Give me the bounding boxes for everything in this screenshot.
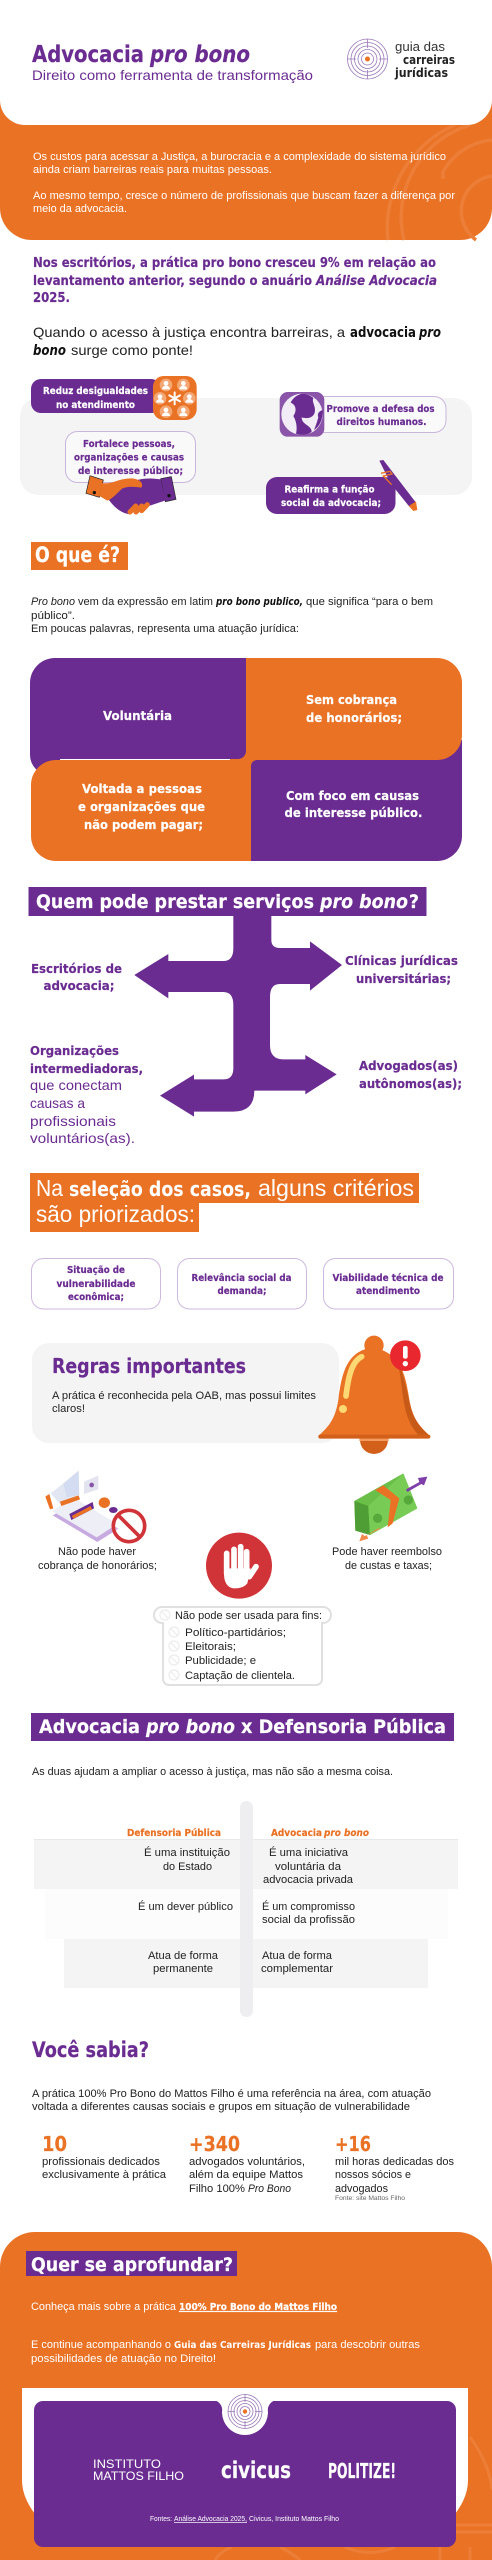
text: não pode haver cobrança: Não pode haver [58,1546,136,1558]
text: call to action: Guia das Carreiras Jurídicas [174,2339,311,2351]
row 1 [144,1846,354,1886]
icon: handshake [86,476,176,514]
logo: maze [228,2394,262,2428]
cell: voltada a pessoas: não podem pagar; [84,817,203,832]
highlight: pro bono growth: levantamento anterior, segundo o anuário [33,273,312,289]
stat: 10: 10 [42,2132,67,2156]
bridge statement: bono [33,343,66,359]
bridge statement: pro [418,325,441,341]
text: call to action: para descobrir outras [315,2339,420,2351]
stat: +16: nossos sócios e [335,2169,411,2181]
label: organizações: Organizações [30,1043,119,1058]
card: função social [266,477,396,514]
text: definition: público”. [31,610,75,622]
cell: com foco: Com foco em causas [286,788,419,803]
card: viabilidade: Viabilidade técnica de [332,1273,444,1284]
card: relevância [178,1258,306,1309]
text: sources: Fontes: [150,2516,172,2523]
cell: sem cobrança: Sem cobrança [306,692,397,707]
label: advogados: Advogados(as) [359,1058,458,1073]
stat: +340: além da equipe Mattos [189,2169,304,2181]
text: reembolso: de custas e taxas; [345,1560,432,1572]
card: vulnerabilidade: Situação de [67,1265,125,1276]
label: organizações: que conectam [30,1077,122,1093]
heading: você sabia: Você sabia? [32,2038,149,2062]
highlight: pro bono growth: 2025. [33,290,70,306]
text: reembolso [332,1546,442,1572]
row 3: permanente [153,1963,213,1975]
panel: quer se aprofundar [0,2232,492,2560]
row 3: Atua de forma [148,1950,219,1962]
title [32,42,313,83]
stat: 10: profissionais dedicados [42,2156,161,2168]
row 2: É um dever público [138,1900,233,1913]
card: direitos humanos: direitos humanos. [336,417,426,428]
label: organizações: voluntários(as). [30,1130,135,1146]
logo: guia das carreiras jurídicas: jurídicas [394,66,448,80]
stat: 10: exclusivamente à prática [42,2169,167,2181]
card: função social: social da advocacia; [281,498,381,509]
panel: regras importantes [32,1343,339,1443]
logo: guia das carreiras jurídicas [348,39,455,80]
card: vulnerabilidade: vulnerabilidade [56,1279,136,1290]
cell: com foco: de interesse público. [284,805,422,820]
heading: advocacia x defensoria [31,1713,454,1741]
cell: com foco [284,788,422,820]
bridge statement: advocacia [350,325,416,341]
column headers: Defensoria Pública [127,1827,221,1839]
stat: +16: +16 [335,2132,371,2156]
card: relevância: demanda; [218,1286,266,1297]
logo: civicus: civicus [221,2458,291,2484]
row 1: advocacia privada [263,1874,354,1886]
logo: guia das carreiras jurídicas: guia das [395,39,446,54]
icon: stop hand [206,1533,272,1599]
stat: 10 [42,2132,167,2181]
text: mattos filho [32,2088,431,2113]
label: advogados [359,1058,462,1091]
text: reembolso: Pode haver reembolso [332,1546,442,1558]
text: call to action: 100% Pro Bono do Mattos Filho [179,2302,337,2313]
heading: quem pode [28,887,426,916]
callout: não pode ser usada: Publicidade; e [185,1655,256,1667]
heading: Quer se aprofundar? [31,2254,233,2276]
panel: regras importantes: A prática é reconhecida pela OAB, mas possui limites [52,1390,317,1402]
callout: não pode ser usada: Não pode ser usada para fins: [175,1610,322,1622]
text: definition: pro bono publico, [215,595,303,608]
callout: não pode ser usada: Captação de clientela. [185,1670,295,1682]
label: organizações: causas a [30,1095,85,1111]
label: organizações: profissionais [30,1113,116,1129]
row 2: social da profissão [262,1914,355,1926]
logo: instituto mattos filho: MATTOS FILHO [93,2469,184,2483]
row 1: voluntária da [275,1861,342,1873]
callout: não pode ser usada: Eleitorais; [185,1641,236,1653]
row 3 [148,1950,333,1975]
card: direitos humanos: Promove a defesa dos [326,404,435,415]
text: sources: Análise Advocacia 2025, [174,2516,247,2523]
stat: +340 [189,2132,305,2195]
panel: footer white backing [22,2388,468,2520]
card: fortalece pessoas: de interesse público; [78,465,183,477]
panel: footer purple card [34,2394,456,2547]
label: clínicas [345,953,458,986]
heading: advocacia x defensoria: x Defensoria Pública [241,1716,446,1738]
title: pro bono [149,42,250,68]
stat: +340: advogados voluntários, [189,2156,305,2168]
row 2 [138,1900,355,1926]
cell: voltada a pessoas: Voltada a pessoas [82,781,202,796]
heading: o que é: O que é? [35,543,120,567]
card: relevância: Relevância social da [192,1273,292,1284]
text: call to action [31,2301,420,2365]
callout: não pode ser usada: Político-partidários; [185,1627,286,1639]
card: viabilidade [324,1258,454,1309]
column headers: Advocacia [271,1828,322,1839]
highlight: pro bono growth [33,255,437,306]
label: escritórios: advocacia; [44,978,114,993]
stat: +16: Fonte: site Mattos Filho [335,2196,406,2202]
heading: quem pode: pro bono [319,891,408,913]
intro text: ainda criam barreiras reais para muitas pessoas. [33,164,272,176]
icon: bell [318,1336,431,1454]
heading: seleção dos casos [30,1173,419,1232]
icon: calculator with prohibition sign [45,1471,145,1542]
intro text [33,151,455,215]
heading: advocacia x defensoria: pro bono [145,1716,235,1738]
bridge statement [33,324,441,359]
table: comparison [34,1801,458,2017]
stat: +16: mil horas dedicadas dos [335,2156,454,2168]
cell: sem cobrança: de honorários; [306,710,402,725]
panel: benefits [20,376,472,514]
intro text: Os custos para acessar a Justiça, a burocracia e a complexidade do sistema jurídico [33,151,446,163]
text: call to action: E continue acompanhando o [31,2339,171,2351]
logo: instituto mattos filho [93,2457,184,2483]
column headers: pro bono [323,1828,369,1839]
callout: não pode ser usada [154,1607,331,1685]
icon: money stack [354,1473,427,1541]
panel: four characteristics grid [30,658,462,861]
card: direitos humanos [310,396,446,432]
highlight: pro bono growth: Análise Advocacia [315,273,437,289]
card: fortalece pessoas: organizações e causas [74,452,184,464]
logo: instituto mattos filho: INSTITUTO [93,2457,161,2471]
text: não pode haver cobrança [38,1546,157,1572]
bridge statement: Quando o acesso à justiça encontra barreiras, a [33,324,345,340]
intro text: Ao mesmo tempo, cresce o número de profissionais que buscam fazer a diferença por [33,190,455,202]
title: Advocacia [32,42,144,68]
icon: people network [153,376,197,420]
text: call to action: Conheça mais sobre a prática [31,2301,177,2313]
highlight: pro bono growth: Nos escritórios, a prática pro bono cresceu 9% em relação ao [33,255,436,271]
text: definition [31,595,433,635]
label: escritórios [31,961,122,993]
card: função social: Reafirma a função [284,484,375,496]
heading: quem pode: Quem pode prestar serviços [36,891,314,913]
card: vulnerabilidade: econômica; [68,1292,124,1303]
text: mattos filho: A prática 100% Pro Bono do Mattos Filho é uma referência na área, com atuação [32,2088,431,2100]
row 1: É uma iniciativa [269,1846,349,1859]
text: mattos filho: voltada a diferentes causas sociais e grupos em situação de vulnerabilidade [32,2101,410,2113]
card: reduz desigualdades [31,379,161,413]
arrow: branching arrows [134,916,342,1117]
cell: voltada a pessoas [31,760,251,861]
label: clínicas: universitárias; [356,971,451,986]
text: definition: Pro bono [31,596,75,608]
heading: seleção dos casos: seleção dos casos, [69,1177,251,1201]
heading: seleção dos casos: Na [36,1175,63,1201]
text: comparison intro: As duas ajudam a ampliar o acesso à justiça, mas não são a mesma coisa. [32,1766,393,1778]
heading: seleção dos casos: são priorizados: [36,1201,195,1227]
cell: sem cobrança [246,658,462,760]
title: Direito como ferramenta de transformação [32,67,313,83]
bridge statement: surge como ponte! [71,342,193,358]
row 3: Atua de forma [262,1950,333,1962]
cell: voluntária [30,658,246,775]
row 3: complementar [261,1963,333,1975]
icon: fountain pen [379,460,417,511]
logo: guia das carreiras jurídicas: carreiras [403,53,455,67]
column headers [127,1827,369,1839]
label: organizações [30,1043,143,1146]
label: clínicas: Clínicas jurídicas [345,953,458,968]
heading: seleção dos casos: alguns critérios [258,1175,414,1201]
text: definition: Em poucas palavras, representa uma atuação jurídica: [31,623,299,635]
label: organizações: intermediadoras, [30,1061,143,1076]
panel: regras importantes: claros! [52,1403,85,1415]
card: reduz desigualdades: no atendimento [56,400,135,411]
stat: +340: +340 [189,2132,240,2156]
text: não pode haver cobrança: cobrança de honorários; [38,1560,157,1572]
text: sources: Civicus, Instituto Mattos Filho [249,2516,339,2523]
card: fortalece pessoas [66,432,196,482]
cell: voluntária: Voluntária [103,708,172,723]
panel: regras importantes: Regras importantes [52,1354,246,1378]
heading: quem pode: ? [409,891,419,913]
stat: +16: advogados [335,2183,388,2195]
cell: voltada a pessoas: e organizações que [78,799,205,814]
text: call to action: possibilidades de atuação no Direito! [31,2353,216,2365]
card: viabilidade: atendimento [356,1286,420,1297]
row 1: É uma instituição [144,1846,230,1859]
panel: intro orange band [0,0,492,240]
label: escritórios: Escritórios de [31,961,122,976]
intro text: meio da advocacia. [33,203,127,215]
label: advogados: autônomos(as); [359,1076,462,1091]
row 2: É um compromisso [262,1900,355,1913]
text: definition: vem da expressão em latim [78,596,213,608]
card: fortalece pessoas: Fortalece pessoas, [83,439,175,450]
icon: globe [280,392,324,437]
logo: politize: POLITIZE! [328,2459,396,2483]
row 1: do Estado [163,1861,212,1873]
card: vulnerabilidade [32,1258,160,1309]
text: definition: que significa “para o bem [306,596,433,608]
heading: advocacia x defensoria: Advocacia [39,1716,140,1738]
stat: +340: Filho 100% [189,2183,245,2195]
card: reduz desigualdades: Reduz desigualdades [43,386,148,397]
stat: +16 [335,2132,454,2202]
stat: +340: Pro Bono [248,2183,291,2195]
